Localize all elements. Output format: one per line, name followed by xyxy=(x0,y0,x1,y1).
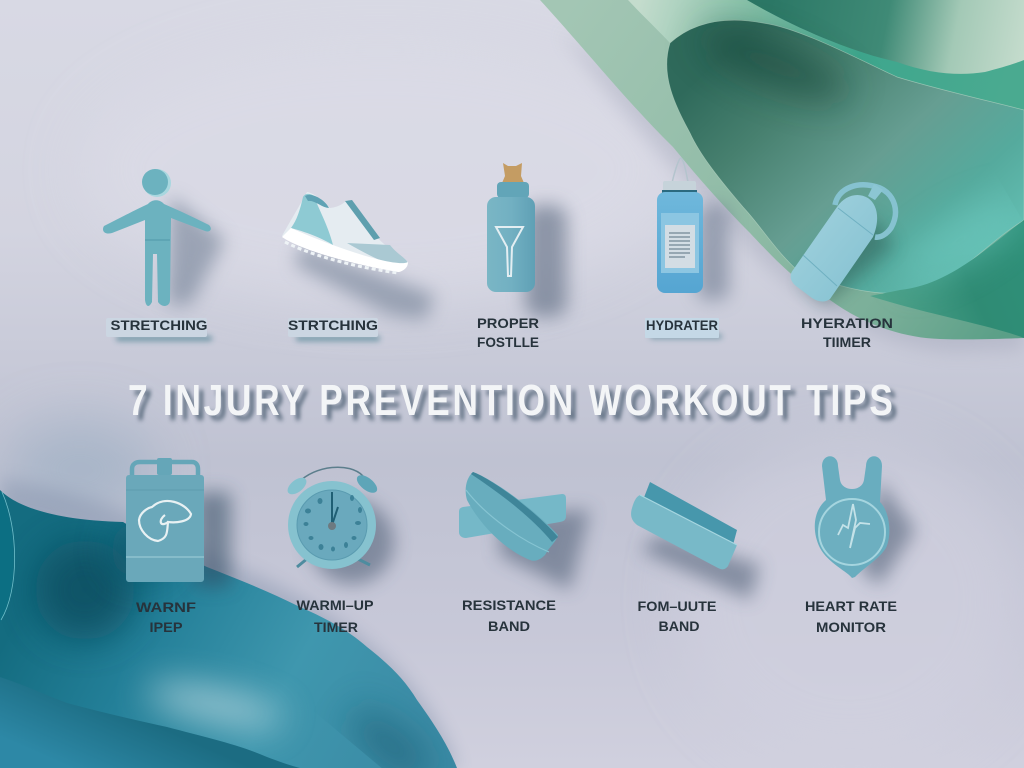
label: shoe stretching: STRTCHING xyxy=(288,317,378,333)
label: proper footle: PROPER xyxy=(477,315,539,331)
icon: foam pad xyxy=(631,482,760,600)
label: warmup tiper: WARNF xyxy=(136,599,197,615)
label: warmup tiper xyxy=(136,599,197,635)
label: heart rate monitor xyxy=(805,598,897,635)
decorative wave: bottom left teal xyxy=(0,478,458,768)
label: foam band xyxy=(638,598,716,634)
label: resistance band: BAND xyxy=(488,618,530,634)
icon: heart rate monitor xyxy=(815,456,915,585)
label: heart rate monitor: MONITOR xyxy=(816,619,886,635)
label: proper footle xyxy=(477,315,539,350)
label: hydration timer: HYERATION xyxy=(801,315,893,331)
label: shoe stretching xyxy=(288,317,380,341)
label: stretching xyxy=(106,317,212,341)
label: foam band: BAND xyxy=(658,618,700,634)
icon: running shoe xyxy=(282,192,435,320)
label: heart rate monitor: HEART RATE xyxy=(805,598,897,614)
title shadow: 7 INJURY PREVENTION WORKOUT TIPS xyxy=(133,381,898,430)
label: warm-up timer: TIMER xyxy=(314,619,358,635)
label: resistance band: RESISTANCE xyxy=(462,597,556,613)
label: foam band: FOM–UUTE xyxy=(638,598,716,614)
icon: warm-up pack xyxy=(126,458,231,587)
icon: hydrater bottle xyxy=(657,158,729,300)
label: hydration timer xyxy=(801,315,893,350)
icon: bottle with Y xyxy=(487,163,567,317)
icon: resistance band xyxy=(459,472,590,590)
label: warm-up timer xyxy=(296,597,374,635)
label: hydrater: HYDRATER xyxy=(646,317,718,333)
label: stretching: STRETCHING xyxy=(110,317,208,333)
label: proper footle: FOSTLLE xyxy=(477,334,539,350)
icon: alarm clock xyxy=(285,467,394,584)
label: warm-up timer: WARMI–UP xyxy=(296,597,374,613)
label: warmup tiper: IPEP xyxy=(150,619,182,635)
label: hydration timer: TIIMER xyxy=(823,334,871,350)
decorative wave: top right green xyxy=(540,0,1024,352)
title: 7 INJURY PREVENTION WORKOUT TIPS xyxy=(128,376,893,425)
icon: tilted flask xyxy=(791,184,895,305)
icon: stretching figure xyxy=(103,169,225,306)
label: resistance band xyxy=(462,597,556,634)
